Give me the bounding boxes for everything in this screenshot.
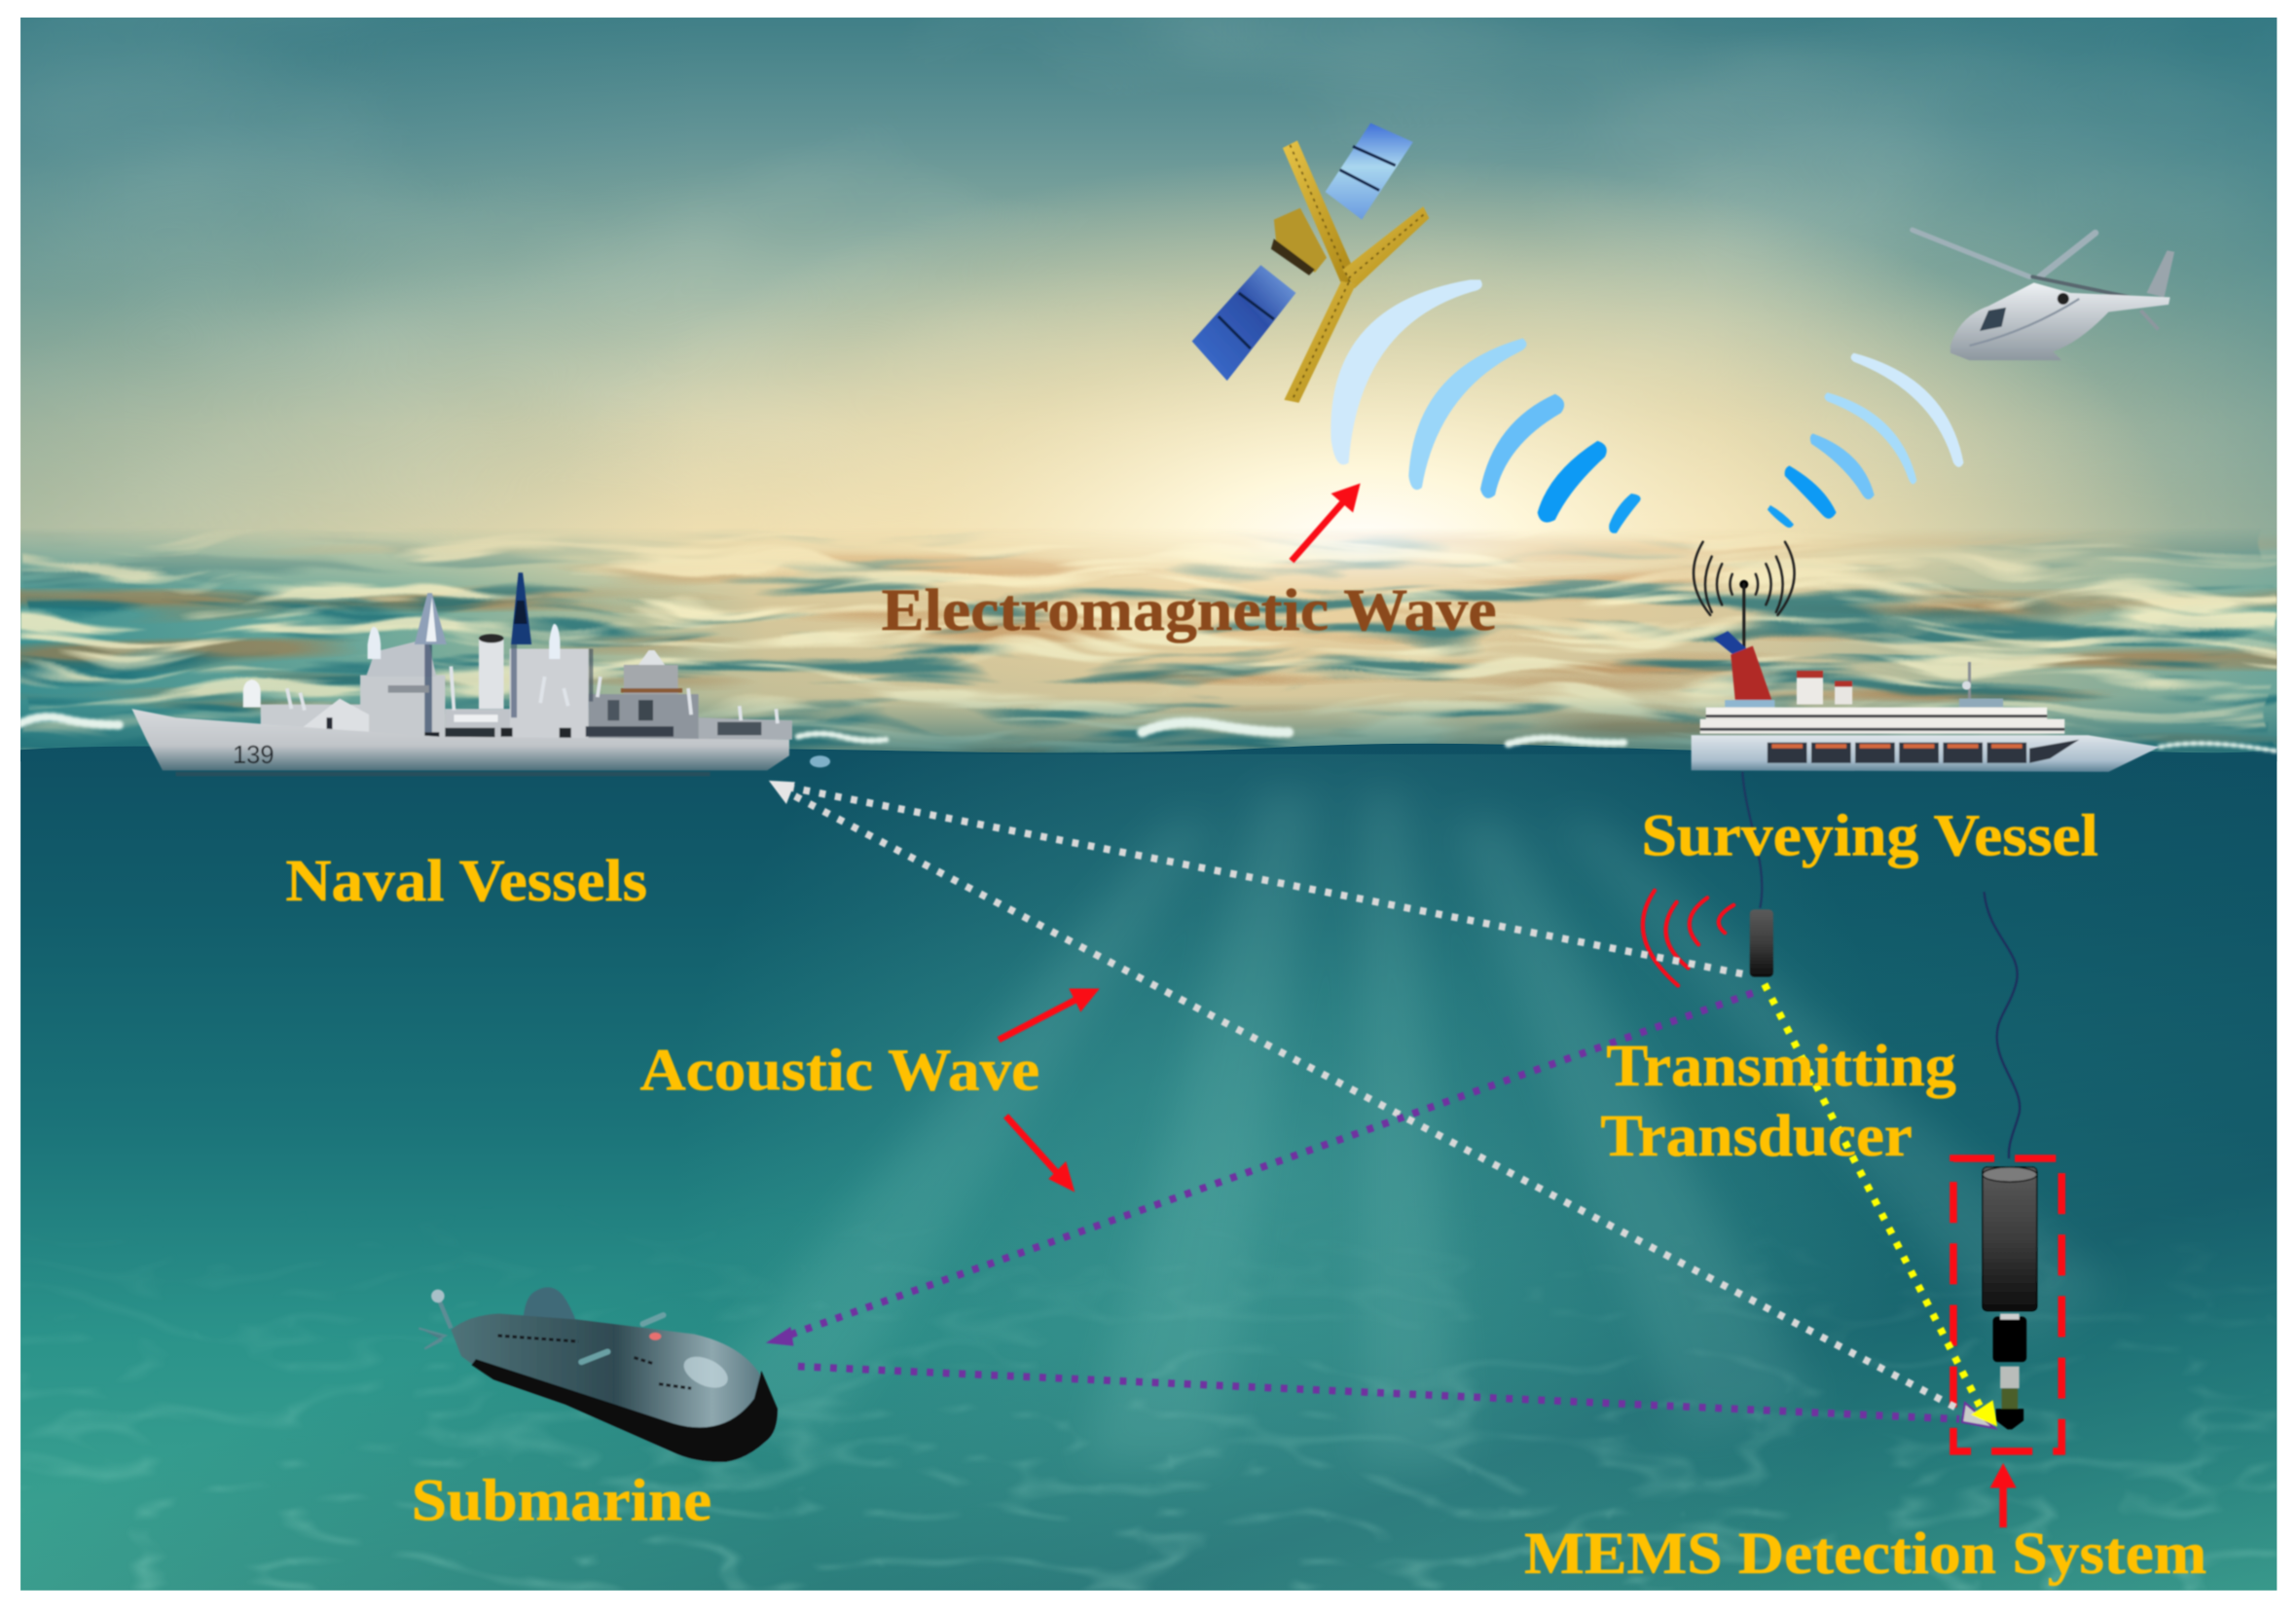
lifeboat windows — [1768, 740, 2079, 763]
side stripe — [1969, 299, 2079, 346]
satellite side arcs — [1330, 279, 1641, 533]
label: submarine: Submarine — [412, 1468, 711, 1534]
hull hatches — [498, 1336, 691, 1388]
arrow to electromagnetic wave — [1292, 483, 1361, 561]
red dashed box — [1953, 1158, 2061, 1451]
surveying vessel — [1692, 542, 2160, 908]
detector housing — [1983, 1167, 2037, 1310]
sun glow — [761, 176, 2101, 592]
small buoy — [810, 755, 830, 767]
submarine — [419, 1287, 778, 1462]
naval vessel superstructure — [243, 572, 792, 741]
purple path to submarine — [787, 993, 1753, 1336]
label: naval vessels: Naval Vessels — [285, 848, 647, 914]
satellite — [1192, 123, 1429, 403]
acoustic paths — [766, 781, 1997, 1428]
rotor blades — [1913, 230, 2131, 297]
detector cable — [1985, 892, 2020, 1158]
detector neck — [1993, 1316, 2026, 1362]
antenna signal — [1694, 542, 1795, 651]
sensor tip — [1996, 1409, 2023, 1429]
white path to detector — [784, 790, 1969, 1414]
label: transmitting: Transmitting — [1606, 1033, 1956, 1099]
transducer body — [1750, 909, 1773, 976]
hull highlight — [679, 1350, 733, 1394]
helicopter — [1913, 230, 2174, 360]
lower solar panel — [1192, 265, 1295, 381]
MEMS detection system — [1953, 892, 2061, 1451]
label: MEMS detection system: MEMS Detection System — [1524, 1521, 2206, 1587]
hull upper — [451, 1313, 778, 1462]
cockpit window — [1980, 308, 2006, 331]
fuselage — [1950, 282, 2170, 360]
underwater body — [20, 744, 2277, 1591]
naval vessel — [131, 572, 830, 776]
upper solar panel — [1326, 123, 1413, 220]
label: transducer: Transducer — [1600, 1103, 1913, 1169]
red sonar arcs — [1643, 891, 1733, 985]
panel seams — [1219, 146, 1396, 348]
arrow down acoustic — [1006, 1116, 1075, 1192]
transducer cable — [1742, 772, 1762, 908]
electromagnetic wave arcs — [1330, 279, 1963, 533]
neck highlight — [2000, 1313, 2020, 1320]
rotor hub — [2058, 293, 2069, 305]
tail fin — [2147, 250, 2174, 297]
arrow up acoustic — [999, 989, 1100, 1040]
yellow path to detector — [1765, 984, 1980, 1406]
cloud texture — [20, 18, 2011, 403]
sky — [20, 18, 2277, 618]
surface foam — [20, 716, 2277, 752]
arrow up to detector — [1990, 1463, 2017, 1527]
transmitting transducer — [1643, 891, 1773, 985]
label: surveying vessel: Surveying Vessel — [1641, 803, 2098, 869]
naval vessel hull — [131, 709, 789, 770]
red pointer arrows — [999, 483, 2017, 1527]
white arrowhead — [769, 781, 795, 804]
helicopter side arcs — [1768, 353, 1963, 528]
sensor sleeve — [2000, 1367, 2020, 1388]
sky edge shading — [20, 18, 2277, 604]
dive planes — [581, 1315, 664, 1362]
tail stabiliser — [2141, 311, 2159, 330]
receiver arrowheads — [1962, 1400, 1997, 1428]
underwater light pool — [20, 754, 2277, 1591]
underwater shading — [20, 754, 2277, 1591]
hull underside — [471, 1359, 778, 1462]
periscope mast and tail fins — [419, 1290, 451, 1349]
hull reflection — [176, 772, 711, 776]
sea surface — [20, 528, 2277, 761]
purple arrowhead — [766, 1327, 793, 1346]
purple path to detector — [798, 1367, 1959, 1419]
seabed caustics — [20, 1201, 2277, 1591]
satellite truss — [1271, 140, 1429, 403]
light rays — [688, 790, 2108, 1464]
housing cap — [1983, 1167, 2037, 1182]
white path to transducer — [784, 787, 1742, 973]
label: electromagnetic wave: Electromagnetic Wave — [882, 577, 1497, 643]
hull number 139: 139 — [233, 742, 274, 769]
labels — [285, 577, 2206, 1587]
decks — [1700, 699, 2064, 734]
sensor body — [2002, 1388, 2018, 1411]
label: acoustic wave: Acoustic Wave — [639, 1037, 1039, 1103]
cruise hull — [1692, 735, 2160, 772]
conning tower — [523, 1287, 577, 1333]
red marker — [649, 1333, 661, 1340]
funnel — [1713, 631, 1971, 705]
